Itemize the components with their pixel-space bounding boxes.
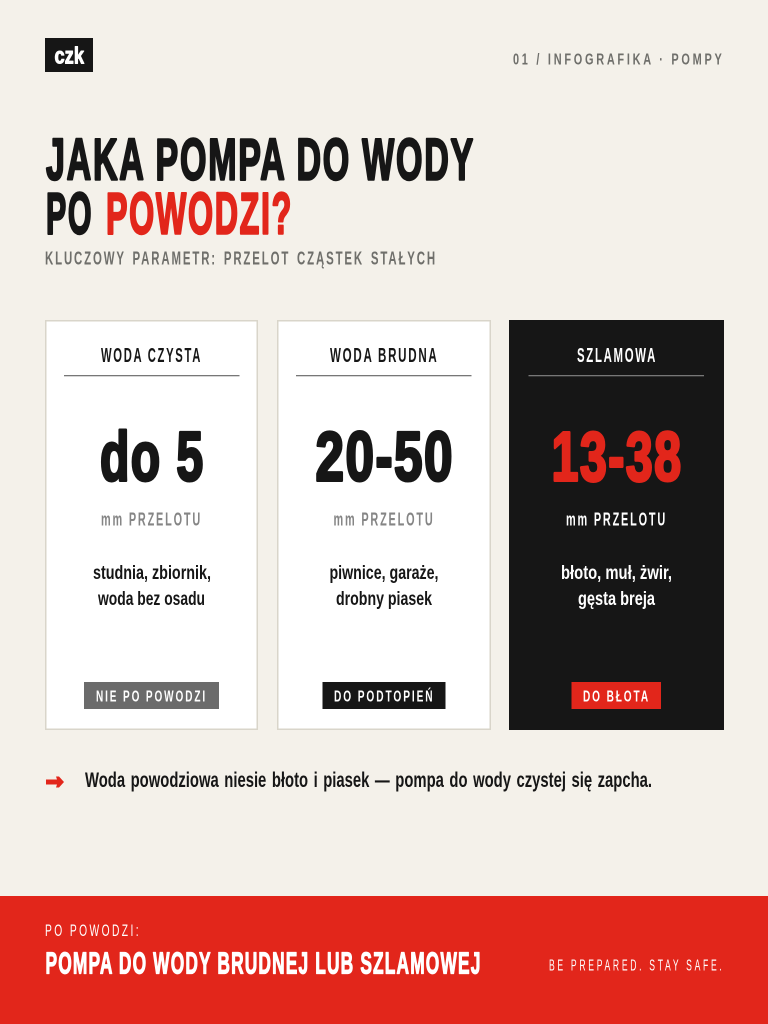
description bbox=[330, 563, 438, 610]
title: PO bbox=[46, 182, 93, 246]
panel: woda brudna bbox=[278, 321, 490, 729]
badge bbox=[84, 682, 219, 709]
unit: mm PRZELOTU bbox=[566, 510, 667, 530]
description: studnia, zbiornik, bbox=[93, 563, 211, 584]
badge: NIE PO POWODZI bbox=[96, 688, 207, 706]
card heading: WODA CZYSTA bbox=[101, 345, 202, 367]
title: POWODZI? bbox=[106, 182, 293, 246]
card heading: WODA BRUDNA bbox=[330, 345, 438, 367]
unit: mm PRZELOTU bbox=[101, 510, 202, 530]
description: błoto, muł, żwir, bbox=[561, 563, 672, 584]
description: piwnice, garaże, bbox=[330, 563, 438, 584]
description: drobny piasek bbox=[336, 589, 432, 610]
footer label: PO POWODZI: bbox=[45, 921, 141, 940]
icon: arrow bbox=[46, 776, 64, 788]
badge: DO BŁOTA bbox=[583, 688, 650, 706]
badge: DO PODTOPIEŃ bbox=[334, 686, 434, 706]
description bbox=[561, 563, 672, 610]
footer band bbox=[0, 896, 768, 1024]
logo bbox=[45, 38, 93, 72]
title bbox=[46, 128, 475, 246]
logo: czk bbox=[54, 42, 84, 68]
big number: 20-50 bbox=[316, 418, 454, 496]
description bbox=[93, 563, 211, 610]
unit: mm PRZELOTU bbox=[334, 510, 434, 530]
badge bbox=[572, 682, 661, 709]
subtitle: KLUCZOWY PARAMETR: PRZELOT CZĄSTEK STAŁYCH bbox=[45, 248, 437, 268]
description: gęsta breja bbox=[578, 589, 655, 610]
title: JAKA POMPA DO WODY bbox=[46, 128, 475, 192]
big number: 13-38 bbox=[552, 418, 682, 496]
card heading: SZLAMOWA bbox=[577, 345, 657, 367]
description: woda bez osadu bbox=[97, 589, 205, 610]
badge bbox=[322, 682, 446, 709]
panel: woda czysta bbox=[46, 321, 257, 729]
big number: do 5 bbox=[100, 418, 204, 496]
panel: szlamowa bbox=[509, 320, 724, 730]
